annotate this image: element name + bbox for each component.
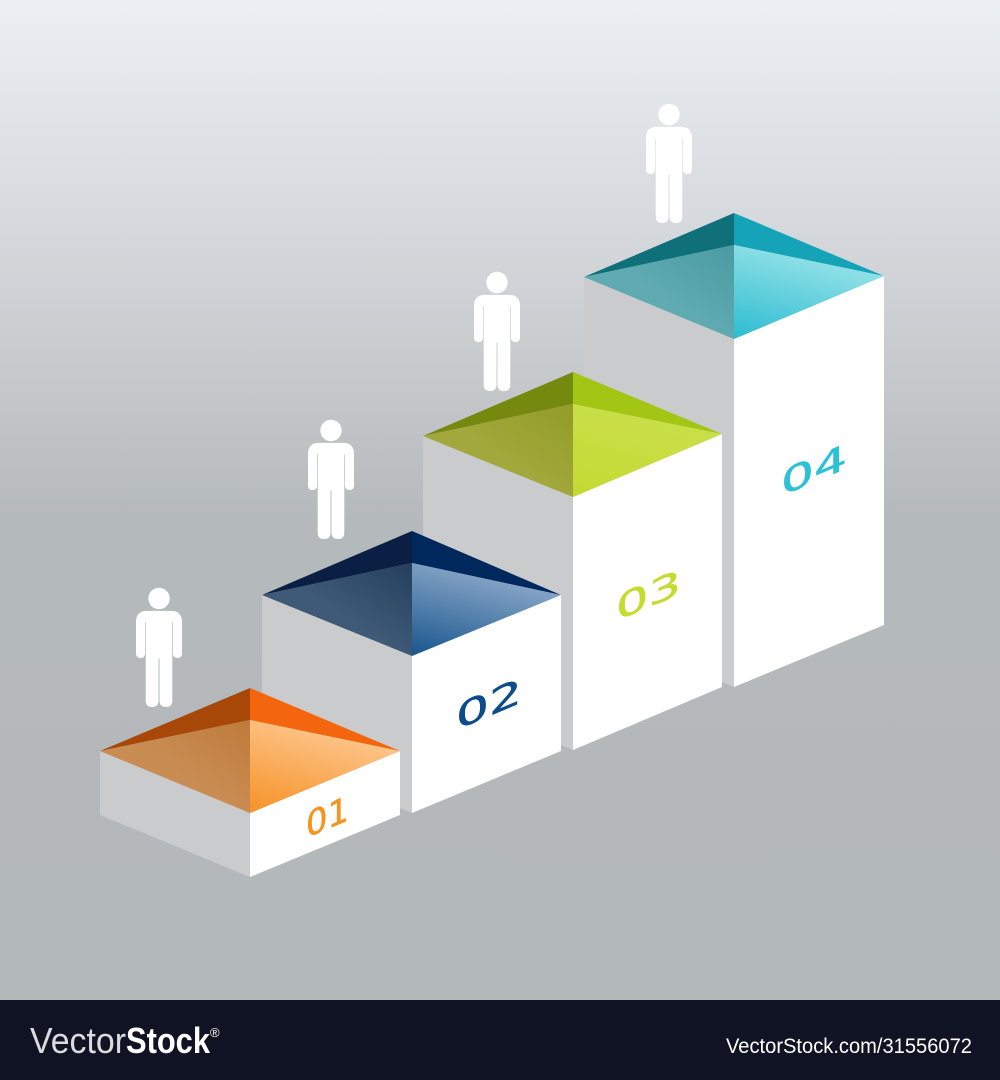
right face xyxy=(734,276,884,687)
top: upper right facet xyxy=(573,372,722,434)
top: upper right facet xyxy=(250,688,400,751)
image id: VectorStock.com/31556072 xyxy=(726,1035,972,1058)
person icon on step 4 xyxy=(646,104,692,223)
person icon on step 1 xyxy=(136,588,182,707)
person icon on step 2 xyxy=(308,420,354,539)
right face xyxy=(250,751,400,877)
left face xyxy=(100,751,250,877)
person icon on step 3 xyxy=(474,272,520,391)
left face xyxy=(584,277,734,687)
step 1 column: orange xyxy=(100,688,400,877)
top: lower right facet xyxy=(734,245,884,339)
number 02: 02 xyxy=(456,670,522,739)
VectorStock logo: ® xyxy=(210,1025,220,1040)
top: lower left facet xyxy=(423,404,573,497)
left face xyxy=(423,436,573,750)
right face xyxy=(573,434,722,750)
top: upper left facet xyxy=(423,372,573,436)
number 01: 01 xyxy=(306,787,349,847)
top: upper right facet xyxy=(412,531,561,595)
top: lower right facet xyxy=(573,404,722,497)
top: upper left facet xyxy=(584,213,734,277)
top: upper left facet xyxy=(262,531,412,595)
number 04: 04 xyxy=(781,436,847,505)
number 03: 03 xyxy=(616,561,681,630)
top: lower left facet xyxy=(262,563,412,656)
footer band xyxy=(0,1000,1000,1080)
top: lower left facet xyxy=(584,245,734,339)
step 4 column: teal xyxy=(584,213,884,687)
right face xyxy=(412,595,561,813)
top: lower right facet xyxy=(412,563,561,656)
top: upper right facet xyxy=(734,213,884,276)
top: lower left facet xyxy=(100,720,250,813)
step 2 column: blue xyxy=(262,531,561,813)
VectorStock logo: VectorStock xyxy=(30,1020,224,1061)
step 3 column: green xyxy=(423,372,722,750)
top: upper left facet xyxy=(100,688,250,751)
top: lower right facet xyxy=(250,720,400,813)
left face xyxy=(262,595,412,813)
